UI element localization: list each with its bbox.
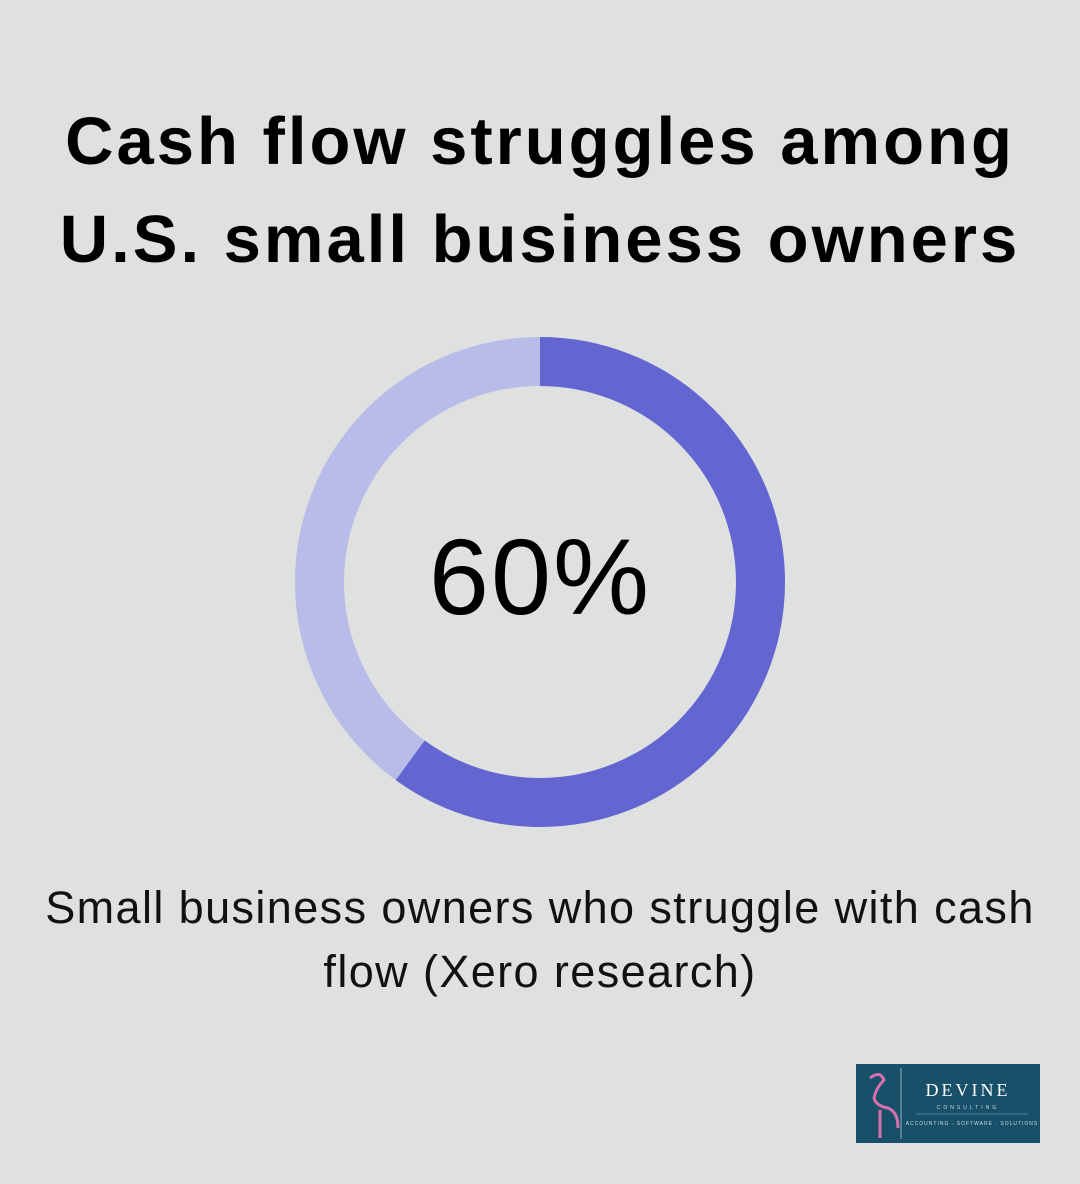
logo: ACCOUNTING · SOFTWARE · SOLUTIONS xyxy=(906,1121,1038,1127)
title: U.S. small business owners xyxy=(60,202,1020,277)
caption xyxy=(45,882,1035,997)
logo xyxy=(856,1064,1040,1143)
title: Cash flow struggles among xyxy=(65,104,1015,179)
donut chart: 60% xyxy=(429,516,651,637)
title xyxy=(60,104,1020,277)
logo: CONSULTING xyxy=(937,1105,999,1111)
caption: Small business owners who struggle with cash xyxy=(45,882,1035,933)
logo: DEVINE xyxy=(926,1080,1010,1100)
caption: flow (Xero research) xyxy=(323,946,757,997)
